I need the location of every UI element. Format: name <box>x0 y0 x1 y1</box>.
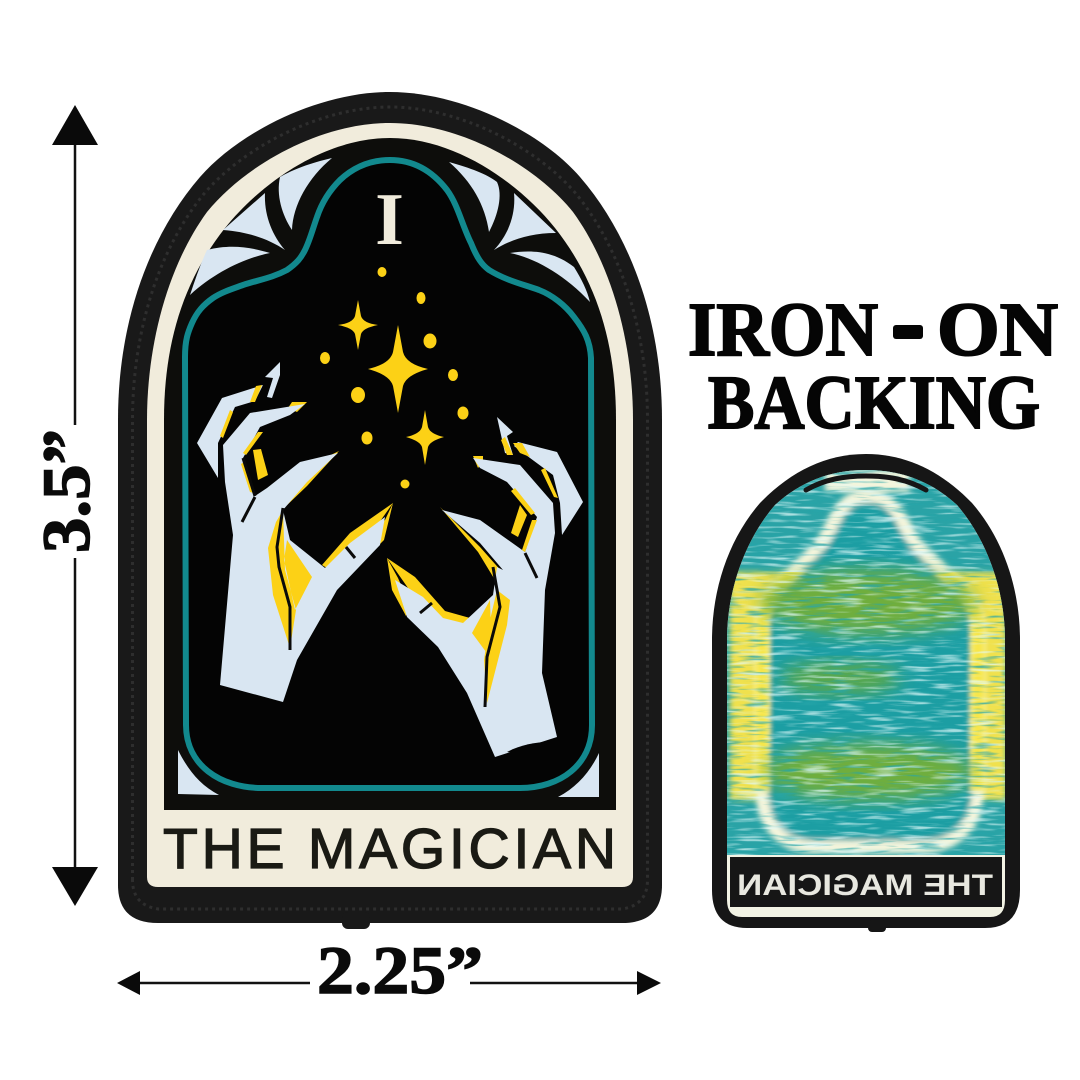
numeral I: I <box>375 179 404 261</box>
patch name: THE MAGICIAN <box>163 817 616 881</box>
mirrored label band <box>730 857 1002 907</box>
finger lines <box>420 553 537 707</box>
bottom stitch <box>868 920 886 932</box>
little finger <box>514 442 583 535</box>
heading: IRON <box>688 288 878 372</box>
teal stitching <box>720 465 1015 855</box>
border stitching <box>132 107 648 909</box>
bottom stitch nub <box>342 912 370 929</box>
stars and dots <box>320 267 468 488</box>
teal bottle frame <box>185 160 592 788</box>
hand shape <box>220 404 385 702</box>
cream inner field <box>147 123 633 887</box>
heading: BACKING <box>708 361 1040 445</box>
left hand <box>197 362 393 702</box>
patch: front <box>118 92 662 929</box>
hand shape <box>395 458 557 757</box>
white neck cap <box>825 470 910 492</box>
thread texture <box>720 465 1015 855</box>
little fingertip <box>265 362 280 398</box>
yellow details <box>472 437 558 703</box>
green areas <box>760 570 976 634</box>
height label: 3.5” <box>28 429 104 553</box>
little finger <box>197 385 263 478</box>
inner top seam <box>806 476 926 490</box>
yellow details <box>220 385 312 648</box>
back border <box>712 454 1020 928</box>
mirrored label: THE MAGICIAN <box>737 869 993 902</box>
black arch panel <box>164 138 616 810</box>
patch border <box>118 92 662 923</box>
yellow frame section <box>762 545 978 790</box>
yellow under-shading <box>387 456 510 627</box>
finger lines <box>242 458 355 650</box>
patch: back <box>712 454 1020 932</box>
width dimension arrow <box>117 971 661 995</box>
little fingertip <box>497 417 513 455</box>
wrist hollow <box>507 742 550 753</box>
height dimension arrow <box>52 105 98 906</box>
width label: 2.25” <box>317 932 483 1008</box>
yellow band <box>730 572 1006 800</box>
right hand <box>387 417 583 757</box>
yellow under-shading <box>268 402 393 570</box>
corner ornaments <box>178 158 599 797</box>
heading <box>688 288 1058 445</box>
heading: ON <box>937 288 1058 372</box>
white bottle glow <box>762 496 978 847</box>
stitched back <box>720 465 1015 920</box>
